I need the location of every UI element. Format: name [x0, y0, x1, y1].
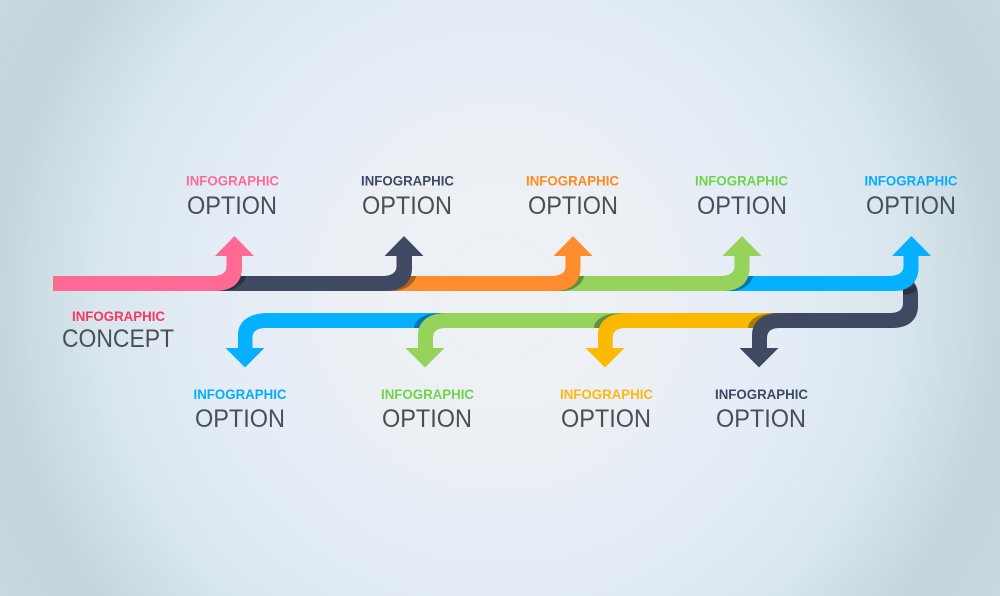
- label: concept: INFOGRAPHIC: [72, 308, 165, 324]
- label: top option pink: OPTION: [187, 192, 277, 220]
- label: bottom option navy: [715, 386, 808, 433]
- label: concept: [62, 308, 174, 353]
- arrow: pink start: [53, 236, 254, 291]
- label: bottom option yellow: OPTION: [561, 405, 651, 433]
- label: bottom option green: OPTION: [382, 405, 472, 433]
- shadow on lower yellow: [748, 313, 785, 328]
- label: top option pink: INFOGRAPHIC: [186, 172, 279, 188]
- label: bottom option green: [381, 386, 474, 433]
- arrow: lower green: [406, 313, 630, 368]
- label: top option orange: [526, 172, 619, 220]
- arrow: upper orange: [375, 236, 592, 291]
- shadow on lower navy: [893, 284, 917, 295]
- label: top option navy: OPTION: [362, 192, 452, 220]
- arrow: lower navy: [740, 280, 918, 368]
- label: bottom option blue: [194, 386, 286, 433]
- label: bottom option blue: OPTION: [195, 405, 285, 433]
- label: top option orange: INFOGRAPHIC: [526, 172, 619, 188]
- label: top option blue: [864, 172, 958, 220]
- shadow on upper green: [551, 276, 584, 291]
- shadow on upper navy: [212, 276, 246, 291]
- shadow on upper blue: [720, 276, 753, 291]
- label: bottom option yellow: INFOGRAPHIC: [560, 386, 653, 402]
- label: top option orange: OPTION: [528, 192, 618, 220]
- arrow: upper blue: [715, 236, 931, 291]
- label: top option blue: INFOGRAPHIC: [864, 172, 958, 188]
- upper arrows row: [53, 236, 931, 291]
- arrow: lower yellow: [586, 313, 785, 368]
- label: top option green: [695, 172, 788, 220]
- label: bottom option yellow: [560, 386, 653, 433]
- arrow: upper green: [545, 236, 762, 291]
- label: top option navy: [361, 172, 454, 220]
- shadow on upper orange: [382, 276, 416, 291]
- label: top option green: INFOGRAPHIC: [695, 172, 788, 188]
- label: bottom option green: INFOGRAPHIC: [381, 386, 474, 402]
- shadow on lower green: [594, 313, 630, 328]
- label: concept: CONCEPT: [62, 325, 174, 353]
- arrow: upper navy: [205, 236, 424, 291]
- label: top option navy: INFOGRAPHIC: [361, 172, 454, 188]
- arrow: lower blue: [226, 313, 450, 368]
- label: bottom option navy: INFOGRAPHIC: [715, 386, 808, 402]
- label: top option blue: OPTION: [866, 192, 956, 220]
- shadow on lower blue: [414, 313, 450, 328]
- lower arrows row: [226, 280, 918, 368]
- label: bottom option navy: OPTION: [716, 405, 806, 433]
- label: bottom option blue: INFOGRAPHIC: [194, 386, 286, 402]
- label: top option pink: [186, 172, 279, 220]
- label: top option green: OPTION: [697, 192, 787, 220]
